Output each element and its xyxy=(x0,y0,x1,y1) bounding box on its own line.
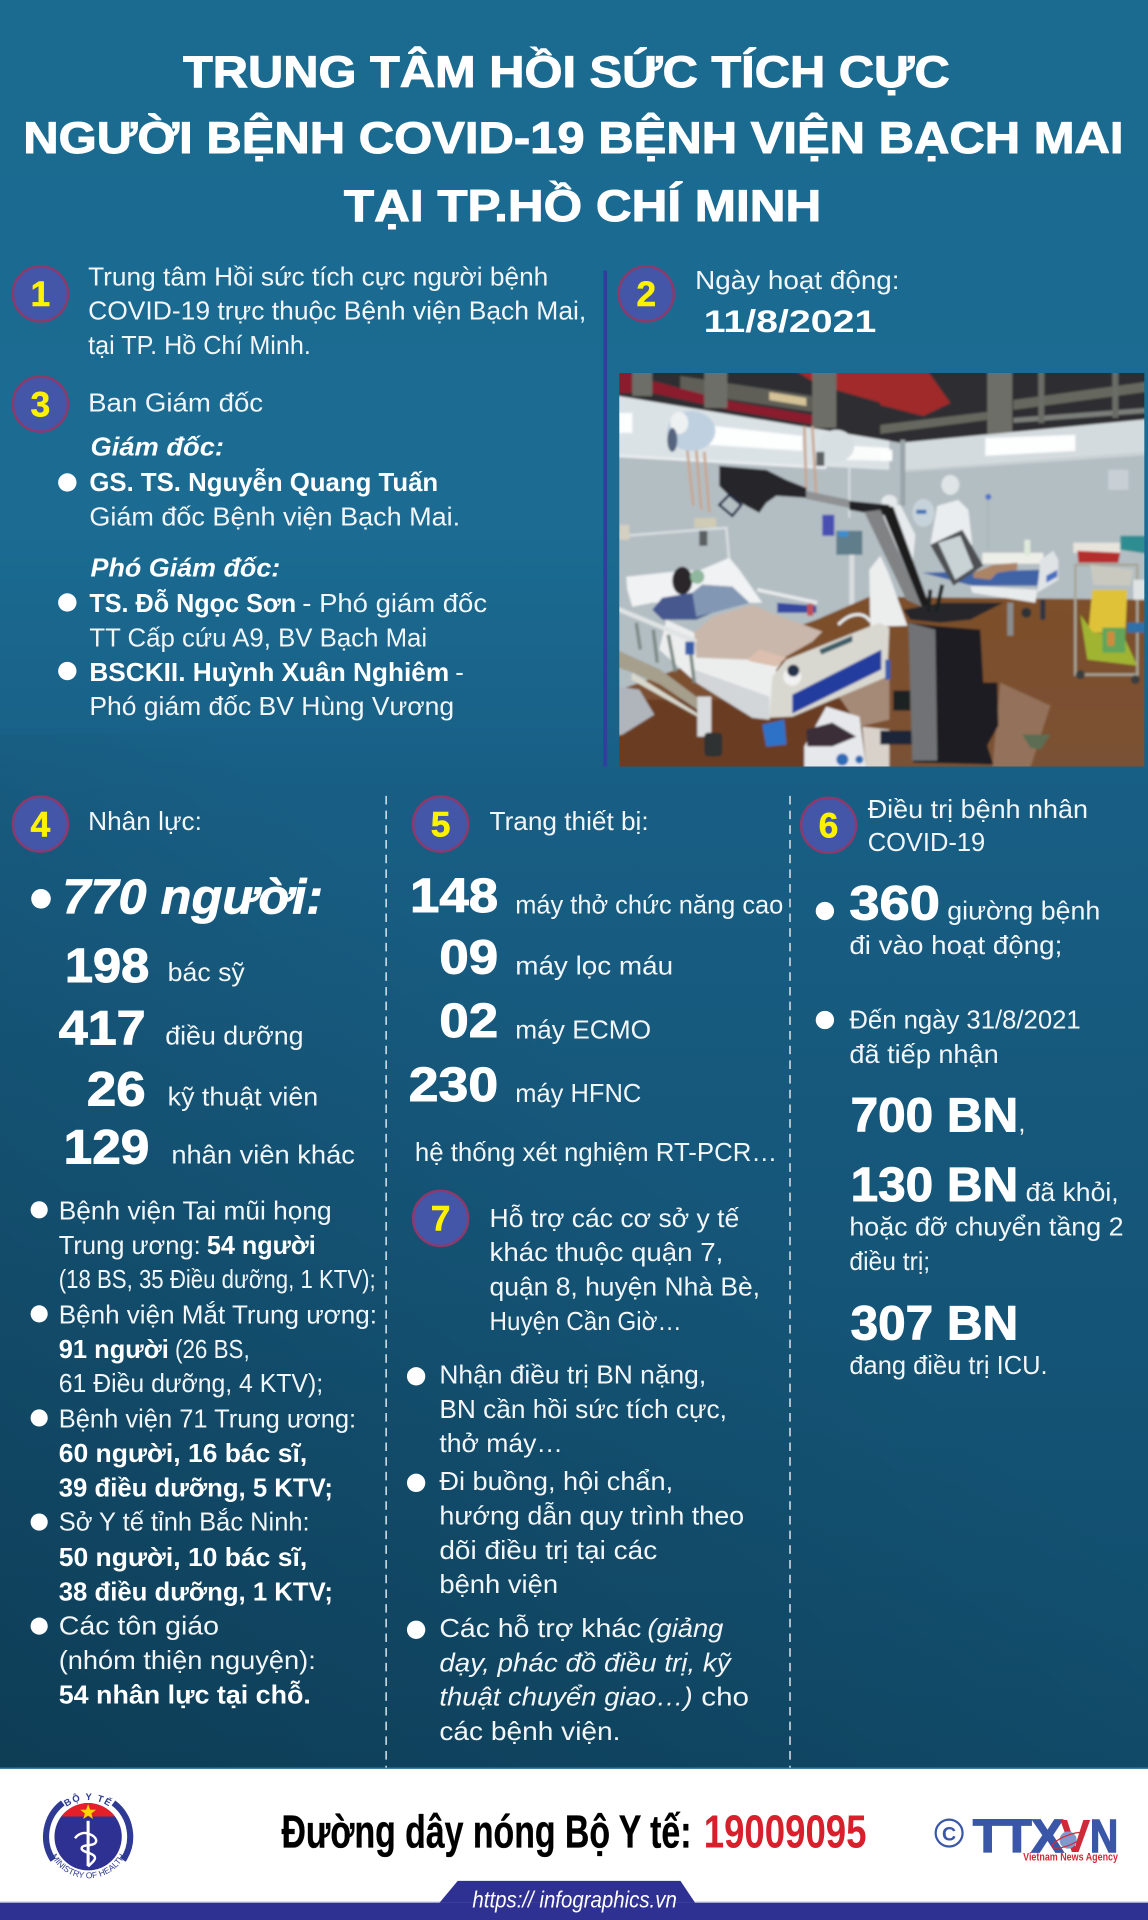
support bullet 3: thuật chuyển giao…) xyxy=(439,1682,693,1712)
support bullet 3 xyxy=(407,1613,749,1746)
badge 7: 7 xyxy=(431,1199,450,1239)
icon: TTXVN logo xyxy=(936,1810,1119,1864)
support bullet 1: thở máy… xyxy=(439,1428,563,1458)
date label: Ngày hoạt động: xyxy=(695,265,900,295)
support bullet 1: BN cần hồi sức tích cực, xyxy=(439,1394,727,1424)
panel 2: start date xyxy=(619,265,900,339)
footer blue bar xyxy=(0,1902,1148,1920)
director entry xyxy=(58,467,460,531)
description text: tại TP. Hồ Chí Minh. xyxy=(88,330,311,360)
heading: Nhân lực: xyxy=(88,806,202,836)
title: TRUNG TÂM HỒI SỨC TÍCH CỰC xyxy=(183,47,950,97)
patients in ICU: đang điều trị ICU. xyxy=(849,1350,1048,1380)
badge 2: 2 xyxy=(636,274,656,314)
badge 1: 1 xyxy=(31,274,50,314)
equipment counts: máy thở chức năng cao xyxy=(515,889,783,919)
panel 3: board of directors xyxy=(13,377,487,721)
badge 4: 4 xyxy=(31,804,51,844)
contributing units list: 60 người, 16 bác sĩ, xyxy=(59,1438,307,1468)
photo: ICU ward with patient and X-ray machine xyxy=(619,373,1144,766)
badge 3: 3 xyxy=(31,384,50,424)
staff breakdown: bác sỹ xyxy=(168,957,246,987)
badge 1 xyxy=(13,266,68,321)
deputy entry 2: - xyxy=(455,657,464,687)
patients received: 700 BN xyxy=(851,1089,1018,1142)
heading: Trang thiết bị: xyxy=(490,806,649,836)
panel 4: human resources xyxy=(13,797,377,1709)
badge 6: 6 xyxy=(819,806,838,846)
vertical divider xyxy=(603,271,607,767)
staff breakdown xyxy=(59,940,355,1174)
footer white band xyxy=(0,1768,1148,1920)
deputy entry 2: BSCKII. Huỳnh Xuân Nghiêm xyxy=(89,657,449,687)
contributing units list: Bệnh viện Tai mũi họng xyxy=(59,1196,332,1226)
panel 1: center description xyxy=(13,261,586,360)
beds stat: giường bệnh xyxy=(947,896,1100,926)
support bullet 1 xyxy=(407,1360,727,1458)
support bullet 3: cho xyxy=(701,1682,749,1712)
contributing units list: Bệnh viện 71 Trung ương: xyxy=(59,1404,356,1434)
x-ray cart xyxy=(893,691,910,711)
contributing units list: Sở Y tế tỉnh Bắc Ninh: xyxy=(59,1507,310,1537)
beds stat: đi vào hoạt động; xyxy=(849,930,1062,960)
equipment counts: máy ECMO xyxy=(515,1014,651,1044)
deputy entry 1 xyxy=(58,588,487,653)
website tab xyxy=(439,1881,695,1913)
patients recovered: hoặc đỡ chuyển tầng 2 xyxy=(849,1212,1124,1242)
deputy entry 1: - Phó giám đốc xyxy=(302,588,487,618)
patients received: đã tiếp nhận xyxy=(849,1039,999,1069)
contributing units list: Các tôn giáo xyxy=(59,1611,219,1641)
ventilator stand base xyxy=(838,615,870,625)
description text: Trung tâm Hồi sức tích cực người bệnh xyxy=(88,261,548,291)
icon: TTXVN logo: N xyxy=(1090,1810,1118,1862)
badge 7 xyxy=(413,1191,468,1246)
contributing units list: (18 BS, 35 Điều dưỡng, 1 KTV); xyxy=(59,1264,376,1294)
contributing units list: 91 người xyxy=(59,1334,169,1364)
contributing units list: (26 BS, xyxy=(175,1334,250,1364)
equipment counts: hệ thống xét nghiệm RT-PCR… xyxy=(415,1137,777,1167)
intro text: quận 8, huyện Nhà Bè, xyxy=(490,1272,760,1302)
icon: TTXVN logo: Vietnam News Agency xyxy=(1023,1852,1119,1864)
footer xyxy=(0,1768,1148,1920)
icon: Ministry of Health logo xyxy=(42,1793,134,1878)
director label: Giám đốc: xyxy=(91,432,224,462)
deputy entry 1: TT Cấp cứu A9, BV Bạch Mai xyxy=(89,623,427,653)
contributing units list: Trung ương: xyxy=(59,1230,201,1260)
title xyxy=(23,47,1124,231)
staff breakdown: điều dưỡng xyxy=(165,1020,304,1050)
equipment counts: 148 xyxy=(410,870,498,923)
support bullet 1: Nhận điều trị BN nặng, xyxy=(439,1360,706,1390)
director entry: Giám đốc Bệnh viện Bạch Mai. xyxy=(89,501,460,531)
support bullet 2: Đi buồng, hội chẩn, xyxy=(439,1466,673,1496)
patients received: Đến ngày 31/8/2021 xyxy=(849,1005,1081,1035)
equipment counts: 02 xyxy=(439,995,498,1048)
total staff: 770 người: xyxy=(62,870,323,924)
equipment counts: máy HFNC xyxy=(515,1078,641,1108)
deputy director label: Phó Giám đốc: xyxy=(91,553,280,583)
panel 7: support to other facilities xyxy=(407,1191,760,1746)
icon: Ministry of Health logo: MINISTRY OF HEALTH xyxy=(54,1854,122,1878)
website tab: https:// infographics.vn xyxy=(472,1887,677,1913)
icon: TTXVN logo: C xyxy=(942,1823,956,1845)
back right bed xyxy=(982,553,1043,564)
deputy entry 2: Phó giám đốc BV Hùng Vương xyxy=(89,691,454,721)
main bed back rail xyxy=(757,590,817,603)
beds stat xyxy=(816,878,1100,960)
patients recovered: điều trị; xyxy=(849,1246,930,1276)
date value: 11/8/2021 xyxy=(704,303,876,339)
x-ray arm and head xyxy=(719,466,806,513)
staff breakdown: kỹ thuật viên xyxy=(168,1082,318,1112)
contributing units list: 54 người xyxy=(207,1230,316,1260)
badge 2 xyxy=(619,266,674,321)
heading: Ban Giám đốc xyxy=(88,387,263,417)
intro text xyxy=(490,1203,760,1336)
contributing units list: 54 nhân lực tại chỗ. xyxy=(59,1679,311,1709)
badge 4 xyxy=(13,797,68,852)
equipment counts: 09 xyxy=(439,931,498,984)
panel 5: equipment xyxy=(409,797,783,1167)
contributing units list: Bệnh viện Mắt Trung ương: xyxy=(59,1300,377,1330)
support bullet 3: dạy, phác đồ điều trị, kỹ xyxy=(439,1647,733,1677)
contributing units list: 61 Điều dưỡng, 4 KTV); xyxy=(59,1368,323,1398)
staff breakdown: 417 xyxy=(59,1002,146,1055)
staff breakdown: nhân viên khác xyxy=(171,1139,355,1169)
support bullet 3: (giảng xyxy=(647,1613,724,1643)
patients in ICU xyxy=(849,1298,1048,1380)
contributing units list: 38 điều dưỡng, 1 KTV; xyxy=(59,1576,333,1606)
deputy entry 2 xyxy=(58,657,464,721)
support bullet 2: hướng dẫn quy trình theo xyxy=(439,1500,744,1530)
main bed xyxy=(626,558,762,607)
badge 5 xyxy=(413,797,468,852)
description text: COVID-19 trực thuộc Bệnh viện Bạch Mai, xyxy=(88,296,586,326)
patients in ICU: 307 BN xyxy=(851,1298,1018,1351)
director entry: GS. TS. Nguyễn Quang Tuấn xyxy=(89,467,438,497)
patients recovered: đã khỏi, xyxy=(1026,1177,1119,1207)
icon: Ministry of Health logo: BỘ Y TẾ xyxy=(64,1793,113,1806)
contributing units list: 39 điều dưỡng, 5 KTV; xyxy=(59,1472,333,1502)
beds stat: 360 xyxy=(849,878,940,931)
icon: TTXVN logo: V xyxy=(1060,1810,1090,1862)
badge 6 xyxy=(801,798,856,853)
staff breakdown: 26 xyxy=(87,1064,146,1117)
protective suits xyxy=(941,475,959,495)
patients recovered: 130 BN xyxy=(851,1159,1018,1212)
support bullet 2: bệnh viện xyxy=(439,1569,558,1599)
intro text: Huyện Cần Giờ… xyxy=(490,1306,682,1336)
patients received xyxy=(816,1005,1081,1142)
heading xyxy=(868,794,1088,857)
description text xyxy=(88,261,586,360)
right supply cart xyxy=(1075,565,1137,675)
heading: COVID-19 xyxy=(868,827,985,857)
contributing units list: (nhóm thiện nguyện): xyxy=(59,1645,316,1675)
title: NGƯỜI BỆNH COVID-19 BỆNH VIỆN BẠCH MAI xyxy=(23,113,1124,163)
equipment counts: 230 xyxy=(409,1059,498,1112)
intro text: Hỗ trợ các cơ sở y tế xyxy=(490,1203,740,1233)
support bullet 3: các bệnh viện. xyxy=(439,1716,621,1746)
title: TẠI TP.HỒ CHÍ MINH xyxy=(344,181,821,231)
icon: TTXVN logo: TTX xyxy=(973,1810,1064,1862)
support bullet 2: dõi điều trị tại các xyxy=(439,1535,657,1565)
support bullet 3: Các hỗ trợ khác xyxy=(439,1613,641,1643)
support bullet 2 xyxy=(407,1466,744,1599)
intro text: khác thuộc quận 7, xyxy=(490,1237,723,1267)
staff breakdown: 129 xyxy=(64,1121,149,1174)
contributing units list: 50 người, 10 bác sĩ, xyxy=(59,1542,307,1572)
patients received: , xyxy=(1018,1107,1026,1137)
dashed column dividers xyxy=(386,796,790,1768)
hotline: 19009095 xyxy=(704,1806,867,1858)
deputy entry 1: TS. Đỗ Ngọc Sơn xyxy=(89,588,296,618)
panel 6: COVID-19 treatment xyxy=(801,794,1124,1380)
equipment counts: máy lọc máu xyxy=(515,951,673,981)
hotline: Đường dây nóng Bộ Y tế: xyxy=(281,1806,691,1858)
heading: Điều trị bệnh nhân xyxy=(868,794,1088,824)
badge 5: 5 xyxy=(431,804,450,844)
contributing units list xyxy=(31,1196,377,1709)
badge 3 xyxy=(13,377,68,432)
staff breakdown: 198 xyxy=(65,940,149,993)
equipment counts xyxy=(409,870,783,1167)
patients recovered xyxy=(849,1159,1124,1276)
